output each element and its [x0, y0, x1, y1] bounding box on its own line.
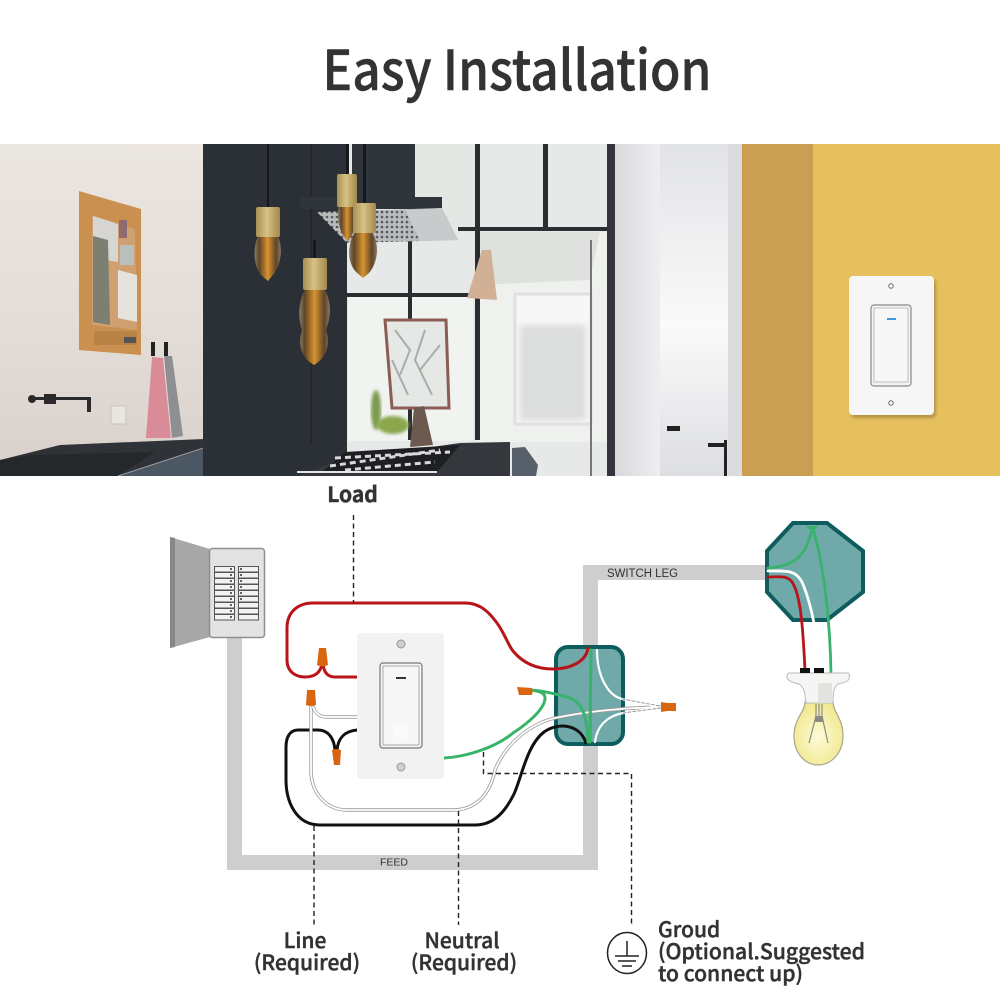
label: ground: [658, 914, 865, 988]
label: line: Line: [284, 925, 326, 955]
wall switch: [849, 276, 936, 418]
plant: [371, 390, 409, 434]
conduit: feed and switch leg: [234, 572, 768, 862]
ceiling box: [767, 523, 863, 620]
yellow wall: [742, 144, 1000, 476]
left wall: [0, 144, 204, 476]
cork board: [79, 191, 141, 355]
wall socket: [111, 406, 126, 424]
label: neutral: Neutral: [425, 925, 499, 955]
label: switch leg: SWITCH LEG: [607, 568, 678, 580]
island counter with cooktop: [297, 406, 510, 476]
wall faucet: [28, 394, 91, 412]
electrical panel: [170, 537, 264, 648]
ceiling wires: [768, 526, 831, 673]
sink counter: [0, 439, 203, 476]
pendant lamps: [255, 144, 377, 365]
title: Easy Installation: [322, 26, 712, 106]
photo: kitchen with installed switch: [0, 144, 1000, 476]
label: neutral: [411, 925, 517, 977]
label: ground: to connect up): [658, 958, 803, 988]
black wire: [286, 726, 586, 825]
right white wall and door: [512, 144, 742, 476]
smart switch: [357, 633, 444, 779]
framed picture in window: [385, 320, 449, 408]
dark panel: [203, 144, 347, 476]
red wire: [287, 603, 588, 677]
light bulb: [787, 668, 849, 765]
wires: [286, 526, 831, 825]
label: ground: Groud: [658, 914, 720, 944]
label: line: (Required): [254, 947, 360, 977]
neutral white wire: [311, 650, 660, 810]
dashed leader lines: [314, 515, 632, 925]
green wire: [444, 650, 591, 758]
label: load: Load: [327, 479, 378, 509]
label: ground: (Optional.Suggested: [658, 936, 865, 966]
range hood: [300, 197, 458, 243]
label: line: [254, 925, 360, 977]
wire nuts: [306, 648, 676, 765]
window area: [347, 144, 615, 476]
icon: ground symbol: [608, 932, 646, 974]
label: neutral: (Required): [411, 947, 517, 977]
junction box: [556, 647, 623, 744]
label: feed: FEED: [380, 856, 408, 868]
towels and hooks: [146, 342, 183, 438]
